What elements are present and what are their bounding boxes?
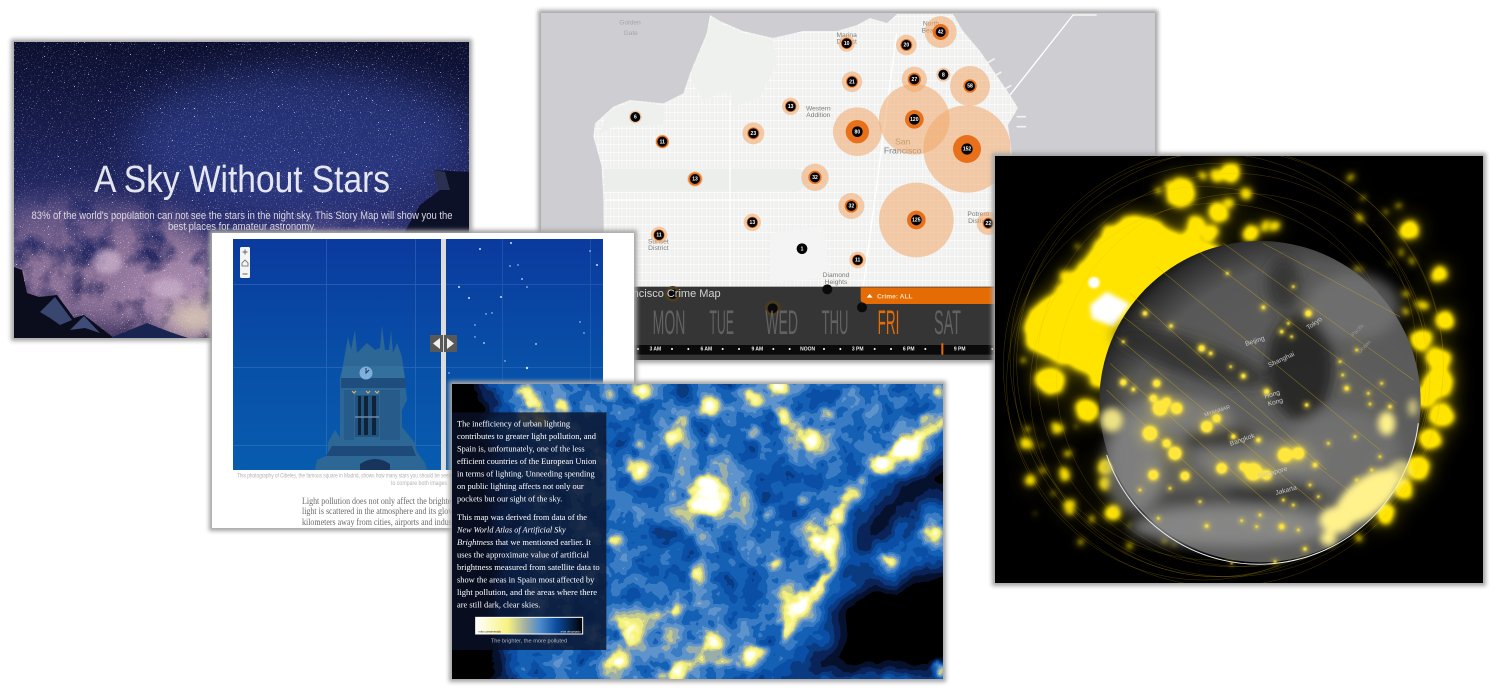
city labels on the globe: Tokyo (1305, 316, 1324, 332)
time of day scale: 6 AM (700, 347, 712, 353)
crime cluster markers: 20 (904, 43, 909, 49)
first paragraph (457, 419, 597, 503)
crime cluster markers: 80 (855, 129, 860, 135)
second paragraph: This map was derived from data of the (457, 513, 587, 522)
photo caption: to compare both images (391, 481, 447, 487)
body text: kilometers away from cities, airports and indust (302, 517, 454, 528)
city labels on the globe: Pacific (1351, 323, 1366, 338)
time of day scale: 9 AM (751, 347, 763, 353)
second paragraph: uses the approximate value of artificial (457, 551, 590, 560)
brightness legend: más contaminado (478, 629, 502, 633)
map place labels: Heights (825, 279, 848, 286)
second paragraph: New World Atlas of Artificial Sky (456, 525, 566, 534)
map place labels: District (968, 218, 989, 225)
first paragraph: on public lighting affects not only our (457, 482, 584, 491)
crime cluster markers: 23 (751, 131, 756, 137)
time of day scale: NOON (800, 347, 816, 353)
map place labels: Golden (619, 19, 641, 26)
near side light clusters (1121, 272, 1392, 564)
crime cluster markers: 11 (855, 258, 861, 264)
crime filter tab: Crime: ALL (877, 294, 913, 301)
crime cluster markers: 58 (967, 84, 973, 90)
weekday labels: FRI (878, 304, 899, 342)
near side bright coast mass (1100, 399, 1417, 546)
crime cluster markers: 120 (910, 117, 919, 123)
crime cluster markers: 22 (986, 221, 991, 227)
crime cluster markers: 42 (938, 30, 944, 36)
city labels on the globe: Beijing (1244, 335, 1266, 348)
map place labels: Diamond (823, 272, 850, 279)
second paragraph: light pollution, and the areas where there (457, 588, 597, 597)
weekday labels: THU (822, 304, 848, 342)
subtitle text: best places for amateur astronomy. (168, 221, 316, 233)
second paragraph: brightness measured from satellite data to (457, 563, 600, 572)
body text: light is scattered in the atmosphere and its glow (302, 506, 454, 517)
map place labels: North (923, 21, 939, 28)
map place labels: Francisco (884, 146, 922, 156)
cloud and continent shading (1103, 257, 1400, 547)
body text (302, 496, 455, 528)
orbit lines crossing the globe (1107, 243, 1413, 517)
city labels on the globe: Kong (1267, 397, 1284, 408)
map place labels: Addition (806, 112, 831, 119)
timeline control bar: SAT (934, 304, 961, 342)
clock tower (315, 326, 427, 470)
crime cluster markers: 21 (849, 79, 855, 85)
night sky background with Milky Way (0, 42, 470, 350)
first paragraph: pockets but our sight of the sky. (457, 494, 562, 503)
map place labels: Sunset (648, 238, 669, 245)
time of day scale: 6 PM (903, 347, 915, 353)
panel: globe of satellite light points (995, 156, 1483, 583)
crime filter tab (861, 287, 1150, 304)
photo caption: This photography of Cibeles, the famous square in Madrid, shows how many stars you should be seeing (237, 474, 455, 480)
far side light clusters (1021, 165, 1452, 548)
weekday labels: MON (653, 304, 685, 342)
crime cluster markers: 13 (692, 177, 698, 183)
crime cluster markers (629, 16, 1011, 268)
swipe handle arrows (430, 239, 457, 470)
map place labels: Potrero (967, 211, 990, 218)
saturated white core (1088, 277, 1130, 327)
panel: A Sky Without Stars title card (14, 42, 469, 338)
brightness legend: más despejado (561, 629, 581, 633)
time of day scale: 3 PM (852, 347, 864, 353)
map base with land and water (541, 13, 1155, 360)
second paragraph: show the areas in Spain most affected by (457, 576, 595, 585)
map place labels: San (895, 137, 911, 147)
crime cluster markers: 152 (963, 147, 971, 153)
crime cluster markers: 8 (942, 72, 945, 78)
weekday labels: WED (765, 304, 798, 342)
brightness legend (476, 617, 583, 644)
city labels on the globe: Hong (1264, 389, 1281, 400)
crime cluster markers: 13 (788, 104, 794, 110)
map place labels: District (648, 245, 669, 252)
crime cluster markers: 13 (750, 220, 755, 226)
city labels on the globe: Bangkok (1229, 432, 1256, 448)
first paragraph: Spain is, unfortunately, one of the less (457, 444, 585, 453)
city labels on the globe (1204, 316, 1373, 497)
panel: Spain light pollution map (452, 384, 943, 679)
time of day scale: 3 AM (649, 347, 661, 353)
map place labels: Marina (836, 32, 857, 39)
map zoom controls (240, 247, 250, 278)
crime cluster markers: 11 (656, 233, 662, 239)
second paragraph (456, 513, 600, 609)
crime cluster markers: 32 (849, 204, 854, 210)
city labels on the globe: Ocean (1357, 339, 1373, 355)
right photo: natural starry sky (446, 239, 603, 470)
panel: San Francisco crime map (541, 13, 1155, 360)
first paragraph: efficient countries of the European Union (457, 457, 597, 466)
time of day scale: 9 PM (954, 347, 966, 353)
weekday labels (653, 304, 961, 342)
map place labels: Beach (922, 28, 941, 35)
map place labels (619, 19, 990, 286)
timeline control bar (541, 284, 1155, 360)
time of day scale (541, 343, 1155, 355)
orbit arcs (1003, 147, 1443, 587)
subtitle text (32, 210, 453, 233)
brightness legend: The brighter, the more polluted (491, 638, 567, 644)
title: A Sky Without Stars (94, 159, 390, 201)
crime cluster markers: 125 (912, 218, 921, 224)
city labels on the globe: Singapore (1257, 466, 1288, 480)
explanatory text panel (452, 412, 606, 650)
contour map of sky brightness (452, 362, 1025, 693)
city labels on the globe: Jakarta (1275, 484, 1298, 497)
black space background (995, 156, 1483, 583)
body text: Light pollution does not only affect the brighter (302, 496, 455, 507)
first paragraph: in terms of lighting. Unneeding spending (457, 469, 595, 478)
mountains silhouette (14, 170, 469, 338)
first paragraph: contributes to greater light pollution, and (457, 432, 597, 441)
city labels on the globe: Shanghai (1267, 351, 1296, 369)
app title: San Francisco Crime Map (594, 288, 721, 300)
city labels on the globe: MYANMAR (1204, 405, 1231, 419)
crime cluster markers: 10 (844, 41, 850, 47)
second paragraph: Brightness that we mentioned earlier. It (457, 538, 592, 547)
crime cluster markers: 27 (912, 77, 917, 83)
panel: Madrid light pollution swipe comparison (212, 233, 634, 528)
second paragraph: are still dark, clear skies. (457, 600, 540, 609)
photo caption (237, 474, 455, 487)
map place labels: Gate (623, 30, 638, 37)
map place labels: District (836, 39, 857, 46)
weekday labels: TUE (709, 304, 734, 342)
map place labels: Western (806, 105, 831, 112)
crime cluster markers: 11 (660, 139, 665, 145)
first paragraph: The inefficiency of urban lighting (457, 419, 570, 428)
crime cluster markers: 6 (634, 115, 637, 121)
left photo: polluted sky with Cibeles tower (233, 239, 441, 470)
globe (1099, 241, 1421, 564)
crime cluster markers: 1 (801, 246, 804, 252)
crime cluster markers: 32 (812, 175, 818, 181)
